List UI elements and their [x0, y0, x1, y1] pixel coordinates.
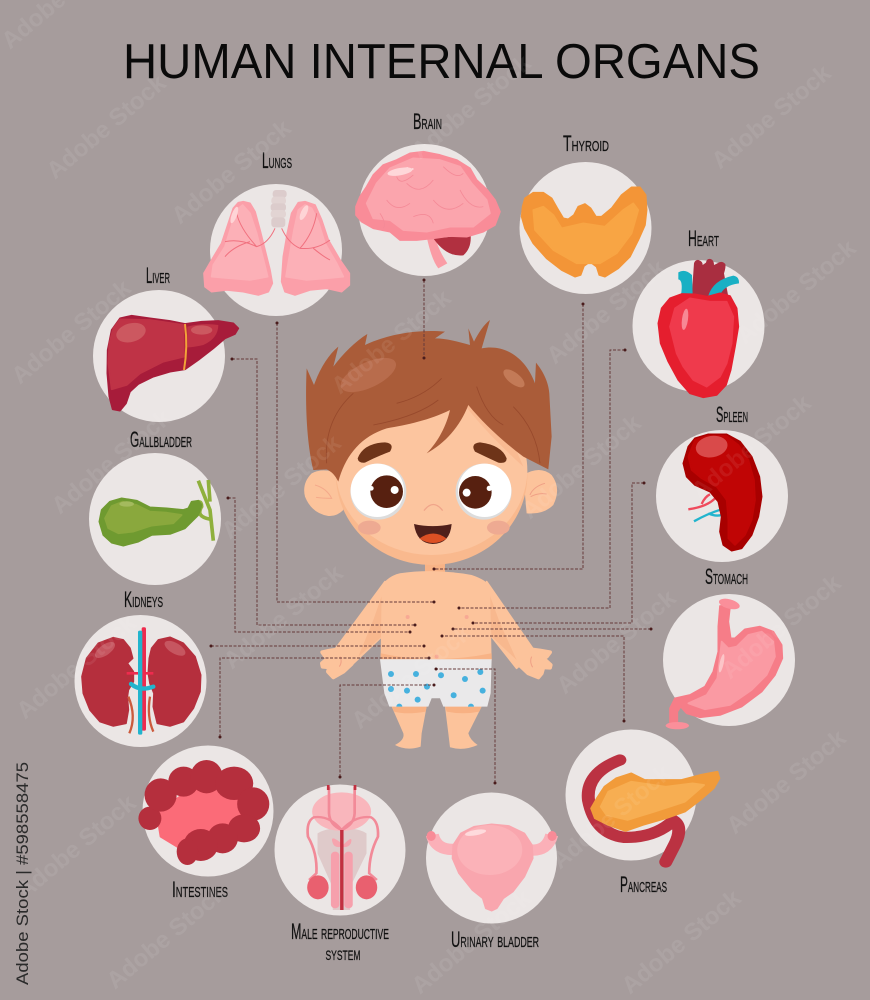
watermarks: Adobe Stock — [102, 879, 232, 995]
boy shorts — [380, 659, 492, 707]
watermarks: Adobe Stock — [732, 234, 862, 350]
label: urinary bladder: Urinary bladder — [451, 927, 539, 952]
leader: male reproductive system — [340, 685, 434, 777]
boy eyebrows — [358, 442, 507, 463]
leader lines — [211, 280, 651, 783]
panel: gallbladder — [89, 427, 221, 585]
leader: stomach — [453, 628, 651, 630]
leader: brain — [423, 280, 425, 358]
watermarks: Adobe Stock — [707, 59, 837, 175]
watermarks: Adobe Stock — [347, 619, 477, 735]
label: pancreas: Pancreas — [620, 872, 667, 897]
watermarks: Adobe Stock — [7, 274, 137, 390]
illustration: boy — [304, 320, 557, 749]
label: spleen: Spleen — [716, 402, 748, 427]
watermarks: Adobe Stock — [12, 789, 142, 905]
label: heart: Heart — [688, 226, 719, 251]
watermarks: Adobe Stock — [327, 284, 457, 400]
watermarks: Adobe Stock — [717, 569, 847, 685]
label: intestines: Intestines — [172, 877, 228, 902]
leader dots — [210, 278, 652, 784]
panel: intestines — [138, 746, 274, 902]
boy ears — [304, 470, 557, 516]
panel: kidneys — [74, 587, 206, 747]
watermarks: Adobe Stock — [407, 884, 537, 1000]
panel: brain — [356, 109, 500, 276]
panel: urinary bladder — [426, 792, 557, 952]
label: stomach: Stomach — [705, 564, 748, 589]
watermarks: Adobe Stock — [547, 759, 677, 875]
icon: urinary bladder — [427, 824, 557, 911]
watermarks: Adobe Stock — [617, 884, 747, 1000]
boy body — [322, 560, 551, 749]
watermarks: Adobe Stock — [167, 114, 297, 230]
icon: heart — [658, 259, 739, 397]
label: thyroid: Thyroid — [563, 131, 609, 156]
leader: lungs — [277, 323, 434, 602]
panel: lungs — [204, 148, 349, 316]
icon: brain — [356, 152, 500, 268]
watermarks: Adobe Stock — [217, 429, 347, 545]
label: male reproductive system: Male reproductive — [291, 919, 389, 944]
watermarks: Adobe Stock — [47, 404, 177, 520]
watermarks: Adobe Stock — [517, 409, 647, 525]
panel: male reproductive system — [274, 784, 406, 965]
watermarks: Adobe Stock — [552, 584, 682, 700]
watermarks: Adobe Stock — [219, 559, 349, 675]
panel: pancreas — [566, 730, 719, 897]
label: male reproductive system: system — [326, 943, 360, 965]
leader: thyroid — [434, 304, 583, 569]
panel: spleen — [656, 402, 788, 562]
boy cheeks — [358, 521, 510, 535]
icon: kidneys — [82, 627, 201, 735]
icon: intestines — [138, 760, 269, 865]
boy face — [333, 385, 527, 565]
panel: thyroid — [520, 131, 652, 294]
leader: pancreas — [442, 636, 624, 721]
panel: liver — [93, 263, 238, 422]
icon: thyroid — [522, 187, 647, 277]
label: liver: Liver — [146, 263, 170, 288]
leader: gallbladder — [228, 498, 410, 632]
label: lungs: Lungs — [262, 148, 292, 173]
watermarks: Adobe Stock — [542, 254, 672, 370]
boy nose — [424, 504, 443, 511]
icon: pancreas — [588, 760, 719, 862]
panel: stomach — [663, 564, 795, 729]
label: kidneys: Kidneys — [124, 587, 163, 612]
leader: heart — [459, 350, 625, 608]
leader: intestines — [220, 658, 429, 737]
stock id: Adobe Stock | #598558475 — [13, 762, 32, 985]
panel: heart — [632, 226, 764, 397]
icon: lungs — [204, 190, 349, 295]
watermarks: Adobe Stock — [722, 724, 852, 840]
label: brain: Brain — [413, 109, 442, 134]
boy hair — [306, 320, 552, 482]
watermarks: Adobe Stock — [687, 389, 817, 505]
icon: male reproductive system — [307, 785, 378, 910]
watermarks: Adobe Stock — [42, 69, 172, 185]
watermarks: Adobe Stock — [407, 49, 537, 165]
leader: kidneys — [211, 645, 424, 647]
leader: liver — [232, 359, 415, 625]
title: HUMAN INTERNAL ORGANS — [123, 35, 760, 89]
icon: spleen — [683, 433, 762, 551]
icon: stomach — [666, 597, 782, 729]
boy eyes — [350, 464, 512, 520]
label: gallbladder: Gallbladder — [130, 427, 192, 452]
leader: urinary bladder — [436, 669, 495, 783]
icon: gallbladder — [99, 480, 213, 546]
watermarks: Adobe Stock — [12, 609, 142, 725]
boy mouth — [414, 524, 452, 544]
icon: liver — [107, 316, 238, 411]
leader: spleen — [473, 483, 644, 623]
